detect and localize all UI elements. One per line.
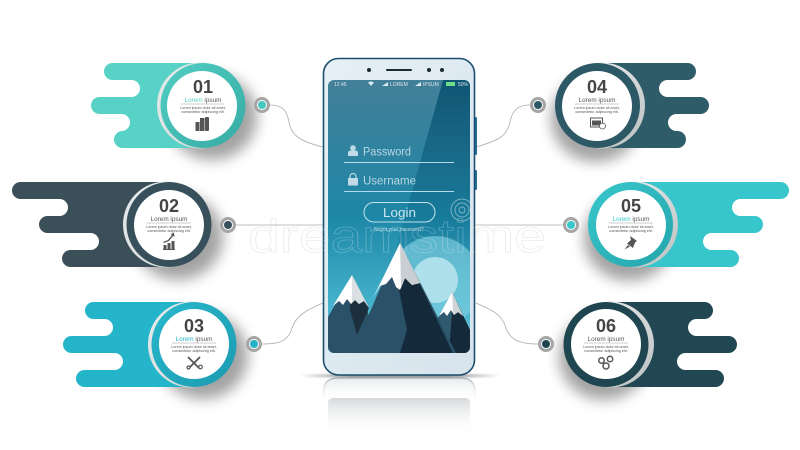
camera and speaker [367, 68, 444, 72]
tail 06 [606, 302, 737, 387]
status bar: LOREM [390, 82, 408, 88]
body 01: consectetur adipiscing elit. [181, 110, 225, 114]
body 04: consectetur adipiscing elit. [575, 110, 619, 114]
panel 06 [559, 302, 737, 400]
dot 05 [564, 218, 578, 232]
icon: calendar clock [590, 118, 606, 129]
screen [328, 80, 481, 353]
heading 04: Lorem ipsum [579, 97, 615, 104]
status bar [334, 82, 468, 86]
body 06: consectetur adipiscing elit. [584, 349, 628, 353]
panel 04 [551, 62, 709, 162]
username field: Username [363, 176, 416, 188]
right mountain [438, 292, 470, 353]
dot 03 [248, 338, 260, 350]
tail 02 [12, 182, 168, 267]
number 05: 05 [621, 196, 641, 216]
tail 03 [63, 302, 193, 387]
watermark over screen: dreamstime [248, 210, 546, 262]
phone shadow [300, 374, 500, 377]
phone reflection [324, 378, 475, 435]
status bar: IPSUM [423, 82, 439, 88]
phone body [324, 58, 474, 375]
heading 03: Lorem ipsum [176, 336, 212, 343]
icon: growth chart [163, 232, 175, 250]
icon: documents [196, 117, 209, 131]
body 04: Lorem ipsum dolor sit amet, [574, 106, 620, 110]
body 01: Lorem ipsum dolor sit amet, [180, 106, 226, 110]
left mountain [328, 275, 369, 353]
forgot password: forgot your password? [374, 227, 424, 233]
heading 05: Lorem ipsum [613, 216, 649, 223]
login button [364, 202, 435, 222]
dot 04 [532, 98, 544, 112]
body 05: consectetur adipiscing elit. [609, 229, 653, 233]
smartphone [270, 58, 477, 376]
sun [412, 257, 458, 303]
login button: Login [383, 206, 416, 220]
heading 01: Lorem ipsum [185, 97, 221, 104]
watermark spiral [451, 199, 473, 221]
number 02: 02 [159, 196, 179, 216]
dot 02 [222, 218, 234, 232]
icon: push pin [624, 236, 637, 250]
body 02: consectetur adipiscing elit. [147, 229, 191, 233]
password field [344, 146, 454, 162]
number 03: 03 [184, 316, 204, 336]
icon: tools [187, 357, 202, 369]
status bar: 12:45 [334, 82, 347, 88]
number 06: 06 [596, 316, 616, 336]
number 04: 04 [587, 77, 607, 97]
body 06: Lorem ipsum dolor sit amet, [583, 345, 629, 349]
tail 04 [598, 63, 709, 148]
body 02: Lorem ipsum dolor sit amet, [146, 225, 192, 229]
panel 05 [584, 182, 789, 281]
dot 01 [256, 98, 268, 112]
icon: lock [348, 174, 358, 186]
dot 06 [540, 338, 552, 350]
panel 02 [12, 182, 223, 280]
connector lines [236, 105, 563, 344]
watermark: dreamstime [248, 210, 546, 262]
side buttons [475, 117, 477, 190]
main mountain [368, 243, 456, 353]
icon: gears [599, 356, 613, 369]
panel 01 [91, 62, 257, 160]
body 03: Lorem ipsum dolor sit amet, [171, 345, 217, 349]
body 05: Lorem ipsum dolor sit amet, [608, 225, 654, 229]
username field [344, 176, 454, 192]
diagonal light band [396, 80, 470, 250]
icon: user [348, 145, 358, 156]
status bar: 50% [458, 82, 469, 88]
heading 06: Lorem ipsum [588, 336, 624, 343]
tail 01 [91, 63, 204, 148]
body 03: consectetur adipiscing elit. [172, 349, 216, 353]
password field: Password [363, 146, 411, 158]
sun halo [403, 236, 470, 318]
tail 05 [631, 182, 789, 267]
panel 03 [63, 302, 248, 399]
number 01: 01 [193, 77, 213, 97]
heading 02: Lorem ipsum [151, 216, 187, 223]
